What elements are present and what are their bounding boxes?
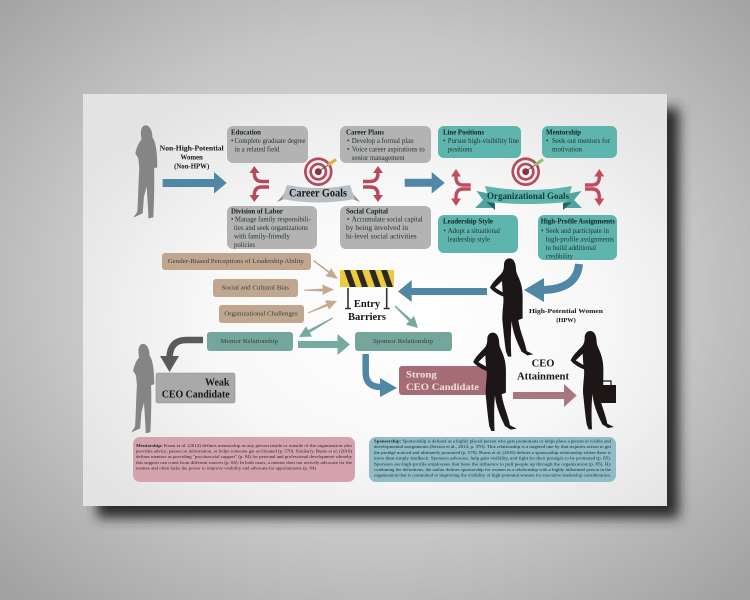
icon: weak candidate woman silhouette — [131, 344, 154, 433]
box: Mentorship: Seek out mentors for — [552, 137, 611, 145]
box: Strong CEO Candidate — [399, 366, 487, 395]
panel: Mentorship definition: provides advice, passes on information, or helps someone get acclimated (p. 570). Similarly, Burns et al. (2016) — [136, 449, 353, 455]
box: High-Profile Assignments — [538, 215, 617, 260]
icon: non-HPW woman silhouette — [133, 125, 157, 218]
box: Social Capital: • — [347, 216, 350, 224]
label: High-Potential Women — [529, 308, 604, 324]
box: Social Capital: hi-level social activities — [346, 232, 417, 240]
icon: strong candidate woman silhouette — [473, 333, 517, 431]
arrow: high-profile to HPW — [524, 264, 579, 302]
label: CEO Attainment: Attainment — [517, 372, 570, 382]
panel: Mentorship definition: mentee and often lacks the power to improve visibility and advocate for appointments (p. 84). — [136, 465, 317, 470]
banner: Organizational Goals: Organizational Goals — [487, 192, 569, 202]
box: Division of Labor: ties and seek organizations — [234, 224, 308, 232]
box: Leadership Style: Leadership Style — [443, 218, 493, 226]
box: Line Positions — [438, 126, 521, 158]
banner: Career Goals: Career Goals — [289, 188, 347, 200]
box: Leadership Style: • — [444, 227, 446, 235]
box: High-Profile Assignments: • — [541, 227, 544, 235]
icon: org goals red fork left — [451, 169, 471, 206]
box: Weak CEO Candidate: Weak — [205, 378, 230, 388]
box: Career Plans: • — [347, 137, 350, 145]
box: High-Profile Assignments: credibility — [546, 252, 573, 260]
box: Education: in a related field — [234, 146, 280, 154]
icon: org target — [511, 157, 543, 186]
box: Education: Education — [231, 130, 261, 136]
box: Social and Cultural Bias: Social and Cultural Bias — [222, 285, 290, 292]
box: Social Capital — [340, 206, 431, 249]
panel: Sponsorship definition: more than simply feedback. Sponsors advocate, help gain visibility, and fight for their protégés to be promoted (p. 85). — [374, 456, 611, 462]
banner: Organizational Goals — [475, 186, 582, 210]
box: Division of Labor: • — [231, 216, 234, 224]
box: Strong CEO Candidate: Strong — [406, 370, 437, 380]
arrow: sponsor to strong candidate — [366, 354, 397, 397]
box: Leadership Style: Adopt a situational — [448, 227, 500, 235]
box: Career Plans: Career Plans — [346, 130, 384, 136]
box: Mentorship: • — [546, 137, 549, 145]
box: Strong CEO Candidate: CEO Candidate — [406, 383, 479, 393]
box: Social Capital: by being involved in — [346, 224, 409, 232]
box: Career Plans: senior management — [352, 154, 405, 162]
arrow: career goals to organizational goals — [405, 172, 445, 194]
box: Mentor Relationship: Mentor Relationship — [221, 338, 278, 345]
panel: Sponsorship definition: developmental assignments (Sexton et al., 2014, p. 370). This relationship is a targeted one by that requires action to get — [374, 444, 612, 450]
label: Non-High-Potential Women — [160, 146, 224, 170]
label: CEO Attainment — [517, 358, 570, 382]
box: Education: Complete graduate degree — [234, 137, 306, 145]
box: Weak CEO Candidate — [156, 373, 235, 403]
box: Line Positions: Line Positions — [443, 130, 484, 136]
box: Weak CEO Candidate: CEO Candidate — [162, 390, 230, 400]
box: Division of Labor: Division of Labor — [231, 208, 283, 216]
box: Education — [227, 126, 308, 163]
box: Education: • — [231, 137, 234, 145]
arrow: non-HPW to career goals — [163, 172, 227, 194]
box: Leadership Style: leadership style — [448, 236, 490, 244]
label: Entry Barriers — [348, 299, 386, 323]
box: Division of Labor: Manage family responsibili- — [235, 216, 311, 224]
paper shadow — [97, 108, 679, 518]
label: Entry Barriers: Entry — [354, 299, 381, 310]
box: Line Positions: • — [443, 137, 446, 145]
box: Social and Cultural Bias — [213, 279, 298, 297]
arrow: HPW to barriers — [398, 280, 487, 302]
paper sheet — [83, 94, 667, 506]
panel: Sponsorship definition — [369, 437, 616, 482]
box: Leadership Style — [438, 215, 518, 253]
icon: CEO woman silhouette with briefcase — [571, 331, 616, 429]
icon: HPW woman silhouette — [490, 258, 533, 357]
arrow: gender bias to barrier — [313, 260, 338, 279]
box: Sponsor Relationship — [355, 332, 452, 351]
box: Gender-Biased Perceptions: Gender-Biased Perceptions of Leadership Ability — [168, 258, 305, 265]
panel: Mentorship definition — [133, 437, 355, 482]
box: Division of Labor: with family-friendly — [234, 232, 290, 240]
box: Mentorship: Mentorship — [546, 130, 581, 136]
banner: Career Goals — [277, 185, 360, 202]
panel: Mentorship definition: Mentorship: Kram et al. (2014) defines mentorship as any person inside or outside of the organization who — [136, 443, 352, 448]
box: Sponsor Relationship: Sponsor Relationship — [373, 338, 433, 345]
label: Entry Barriers: Barriers — [348, 312, 386, 323]
box: Division of Labor: policies — [234, 241, 255, 249]
panel: Mentorship definition: this support can come from different sources (p. 84). In both cases, a mentor does not actively advocate for the — [136, 460, 352, 466]
label: CEO Attainment: CEO — [532, 358, 554, 370]
panel: Sponsorship definition: the protégé noticed and ultimately promoted (p. 570). Burns et al. (2016) defines a sponsorship relationship where there is — [374, 450, 612, 455]
box: Organizational Challenges — [219, 305, 304, 323]
panel: Sponsorship definition: Sponsors are high-profile employees that have the influence to pull people up through the organization (p. 85). By — [374, 461, 611, 466]
label: Non-High-Potential Women: (Non-HPW) — [174, 164, 209, 170]
panel: Sponsorship definition: Sponsorship: Sponsorship is defined as a highly placed person who gets promotions or helps place a person in visible and — [374, 438, 611, 444]
panel: Sponsorship definition: organization that is committed to improving the visibility of high-potential women for executive leadership consideration. — [374, 473, 611, 478]
box: Mentor Relationship — [207, 332, 293, 351]
box: High-Profile Assignments: high-profile assignments — [546, 236, 614, 244]
arrow: barriers to sponsor — [394, 306, 418, 328]
box: Line Positions: Pursue high-visibility line — [448, 137, 519, 145]
box: Social Capital: Accumulate social capital — [352, 216, 423, 224]
icon: org goals red fork right — [585, 169, 604, 206]
arrow: barriers to mentor — [299, 318, 333, 337]
label: Non-High-Potential Women: Non-High-Potential — [160, 146, 224, 152]
box: Division of Labor — [227, 206, 317, 249]
label: Non-High-Potential Women: Women — [181, 154, 203, 162]
box: Line Positions: positions — [448, 146, 472, 154]
arrow: CEO attainment — [513, 384, 577, 407]
box: High-Profile Assignments: to build additional — [546, 244, 596, 252]
box: Gender-Biased Perceptions — [162, 253, 311, 270]
box: Mentorship — [542, 126, 617, 158]
box: Organizational Challenges: Organizational Challenges — [224, 310, 298, 317]
box: High-Profile Assignments: High-Profile Assignments — [541, 218, 615, 226]
arrow: mentor to weak candidate — [160, 340, 203, 372]
icon: career target — [304, 157, 336, 186]
arrow: org challenges to barrier — [308, 300, 337, 314]
box: Mentorship: motivation — [552, 146, 582, 154]
icon: career goals red fork left — [250, 166, 269, 202]
icon: entry barrier sign — [340, 270, 394, 308]
box: Career Plans: Voice career aspirations to — [352, 146, 425, 154]
label: High-Potential Women: (HPW) — [556, 317, 576, 324]
arrow: social bias to barrier — [304, 284, 334, 295]
box: Social Capital: Social Capital — [346, 208, 388, 216]
box: Career Plans: Develop a formal plan — [352, 137, 414, 145]
panel: Sponsorship definition: combining the definitions, the author defines sponsorship for women as a relationship with a highly influential person in the — [374, 467, 611, 473]
infographic content — [131, 125, 617, 482]
label: High-Potential Women: High-Potential Women — [529, 308, 604, 315]
panel: Mentorship definition: defines mentors as providing "psychosocial support" (p. 84) for personal and professional development whereby — [136, 454, 352, 459]
box: Career Plans: • — [347, 146, 350, 154]
arrow: mentor to sponsor — [298, 334, 350, 355]
box: High-Profile Assignments: Seek and participate in — [546, 227, 609, 235]
box: Career Plans — [340, 126, 431, 163]
icon: career goals red fork right — [363, 166, 383, 202]
